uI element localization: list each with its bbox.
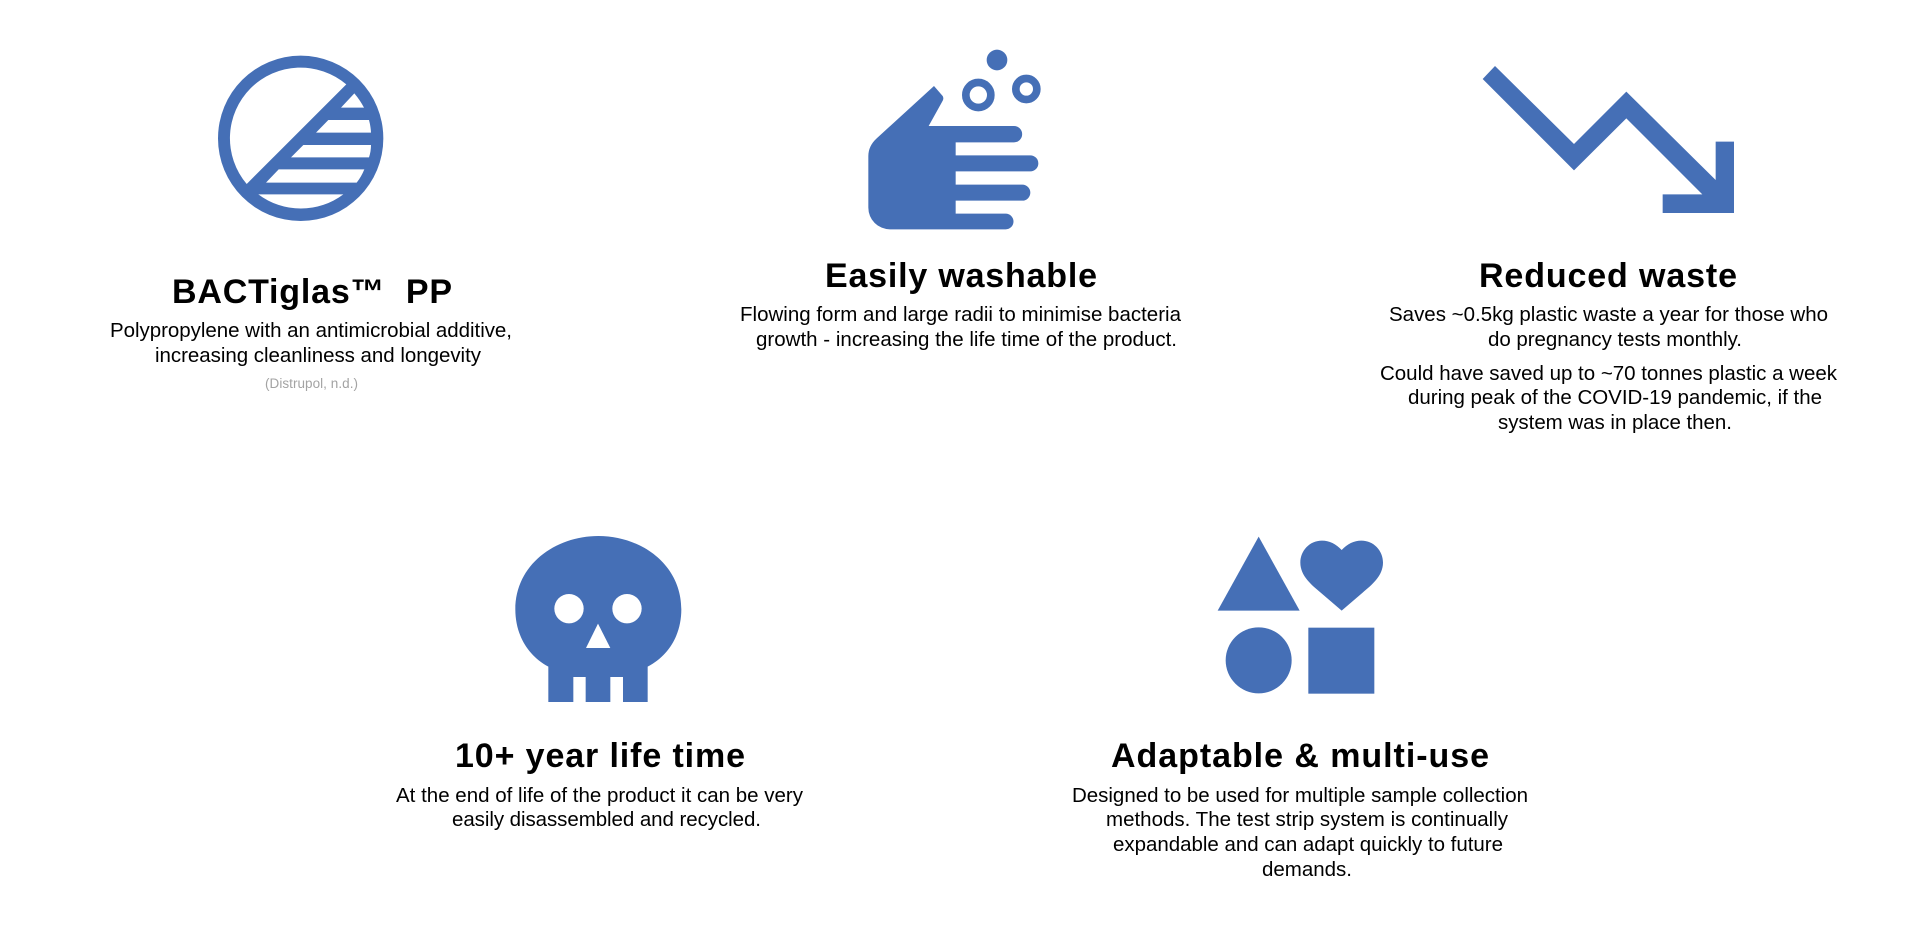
text: BACTiglas description: Polypropylene with an antimicrobial additive, (110, 319, 512, 342)
text: washable description: Flowing form and large radii to minimise bacteria (740, 303, 1182, 326)
panel: BACTiglas PP (110, 56, 512, 391)
heading: Reduced waste: Reduced waste (1479, 257, 1737, 295)
text: adaptable description: demands. (1262, 858, 1352, 881)
panel: Easily washable (740, 50, 1182, 351)
heading: 10+ year life time: 10+ year life time (455, 737, 745, 775)
text: life time description: easily disassembled and recycled. (452, 808, 761, 831)
text: washable description: growth - increasing the life time of the product. (756, 328, 1177, 351)
text: life time description: At the end of life of the product it can be very (396, 784, 804, 807)
icon: skull (515, 536, 681, 702)
text: adaptable description: expandable and can adapt quickly to future (1113, 833, 1503, 856)
text: reduced waste description: Could have saved up to ~70 tonnes plastic a week (1380, 362, 1838, 385)
text: adaptable description: Designed to be used for multiple sample collection (1072, 784, 1528, 807)
text: adaptable description: methods. The test strip system is continually (1106, 808, 1509, 831)
icon: downward trend arrow (1483, 66, 1734, 213)
text: washable description (740, 303, 1182, 351)
panel: 10+ year life time (396, 536, 804, 831)
panel: Reduced waste (1380, 66, 1838, 434)
text: reduced waste description: during peak of the COVID-19 pandemic, if the (1408, 386, 1822, 409)
heading: Adaptable & multi-use: Adaptable & multi-use (1111, 737, 1489, 775)
heading: BACTiglas PP: BACTiglas™ PP (172, 273, 452, 311)
icon: hand with bubbles (868, 50, 1038, 229)
text: reduced waste description (1380, 303, 1838, 434)
text: reduced waste description: system was in place then. (1498, 411, 1732, 434)
text: BACTiglas description (110, 319, 512, 367)
heading: Easily washable: Easily washable (825, 257, 1097, 295)
text: adaptable description (1072, 784, 1528, 881)
citation: Distrupol: (Distrupol, n.d.) (265, 376, 358, 391)
panel: Adaptable & multi-use (1072, 537, 1528, 881)
text: life time description (396, 784, 804, 831)
text: BACTiglas description: increasing cleanliness and longevity (155, 344, 482, 367)
text: reduced waste description: do pregnancy tests monthly. (1488, 328, 1742, 351)
icon: four shapes (1218, 537, 1383, 694)
icon: hatched circle (218, 56, 383, 221)
text: reduced waste description: Saves ~0.5kg plastic waste a year for those who (1389, 303, 1828, 326)
